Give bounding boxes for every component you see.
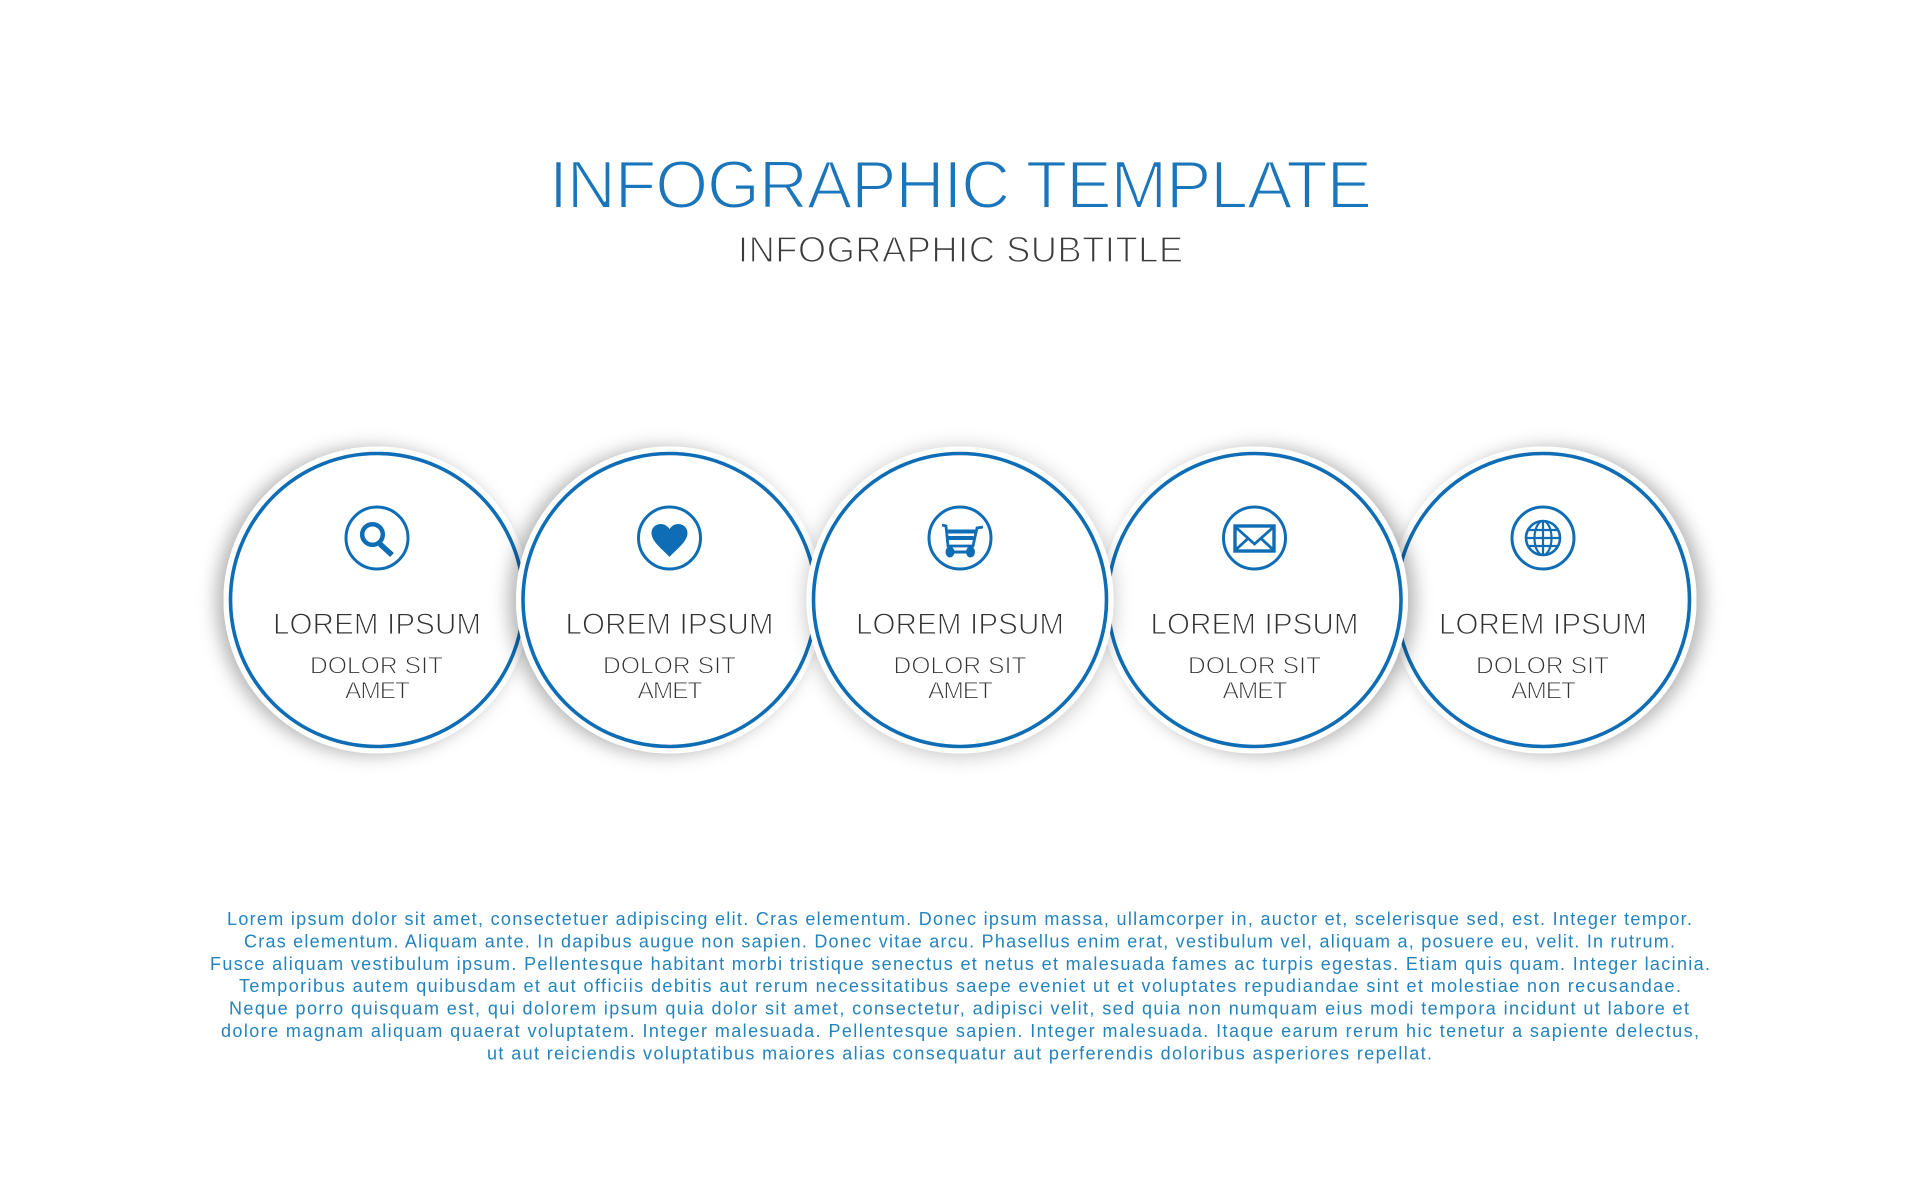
circle 5 ring (1396, 454, 1690, 746)
panel: circle 4 envelope (1101, 446, 1408, 754)
circle 1 heading: LOREM IPSUM (273, 608, 481, 641)
circle 2 disc (516, 446, 823, 754)
circle 1 caption line 1: DOLOR SIT (310, 652, 443, 680)
body paragraph: dolore magnam aliquam quaerat voluptatem. Integer malesuada. Pellentesque sapien. Integer malesuada. Itaque earum rerum hic tenetur a sapiente delectus, (221, 1021, 1699, 1041)
body paragraph: Lorem ipsum dolor sit amet, consectetuer adipiscing elit. Cras elementum. Donec ipsum massa, ullamcorper in, auctor et, scelerisque sed, est. Integer tempor. (227, 909, 1692, 929)
circle 3 ring (814, 454, 1106, 746)
circle 1 ring (230, 454, 524, 746)
icon: shopping cart (929, 507, 991, 569)
circle 5 heading: LOREM IPSUM (1439, 608, 1647, 641)
body paragraph: Cras elementum. Aliquam ante. In dapibus augue non sapien. Donec vitae arcu. Phasellus enim erat, vestibulum vel, aliquam a, posuere eu, velit. In rutrum. (244, 931, 1675, 951)
circle 1 disc (224, 446, 530, 754)
circle 4 disc (1101, 446, 1408, 754)
subtitle: INFOGRAPHIC SUBTITLE (738, 229, 1183, 270)
circle 1 caption line 2: AMET (345, 678, 410, 704)
body paragraph: Temporibus autem quibusdam et aut officiis debitis aut rerum necessitatibus saepe eveniet ut et voluptates repudiandae sint et molestiae non recusandae. (239, 976, 1681, 996)
panel: circle 3 cart (806, 446, 1114, 754)
panel: circle 2 heart (516, 446, 823, 754)
icon: heart (638, 507, 700, 569)
circle 3 heading: LOREM IPSUM (856, 608, 1064, 641)
circle 4 heading: LOREM IPSUM (1150, 608, 1358, 641)
circle 2 heading: LOREM IPSUM (566, 608, 774, 641)
body paragraph: Neque porro quisquam est, qui dolorem ipsum quia dolor sit amet, consectetur, adipisci velit, sed quia non numquam eius modi tempora incidunt ut labore et (229, 999, 1689, 1019)
circle 2 ring (523, 454, 816, 746)
icon: magnifying glass (346, 507, 408, 569)
body paragraph: Fusce aliquam vestibulum ipsum. Pellentesque habitant morbi tristique senectus et netus et malesuada fames ac turpis egestas. Etiam quis quam. Integer lacinia. (210, 954, 1710, 974)
circle 3 caption line 2: AMET (928, 678, 993, 704)
icon: envelope (1224, 507, 1286, 569)
icon: globe (1512, 507, 1574, 569)
circle 3 caption line 1: DOLOR SIT (894, 652, 1027, 680)
circle 2 caption line 1: DOLOR SIT (603, 652, 736, 680)
circle 4 caption line 1: DOLOR SIT (1188, 652, 1321, 680)
body paragraph: ut aut reiciendis voluptatibus maiores alias consequatur aut perferendis doloribus asperiores repellat. (487, 1043, 1432, 1063)
title: INFOGRAPHIC TEMPLATE (549, 147, 1372, 223)
panel: circle 5 globe (1390, 446, 1696, 754)
circle 4 caption line 2: AMET (1222, 678, 1288, 704)
panel: circle 1 search (224, 446, 530, 754)
circle 5 caption line 1: DOLOR SIT (1476, 652, 1609, 680)
circle 3 disc (806, 446, 1114, 754)
circle 5 caption line 2: AMET (1511, 678, 1576, 704)
circle 4 ring (1108, 454, 1401, 746)
body paragraph (210, 909, 1710, 1063)
circle 2 caption line 2: AMET (638, 678, 703, 704)
circle 5 disc (1390, 446, 1696, 754)
